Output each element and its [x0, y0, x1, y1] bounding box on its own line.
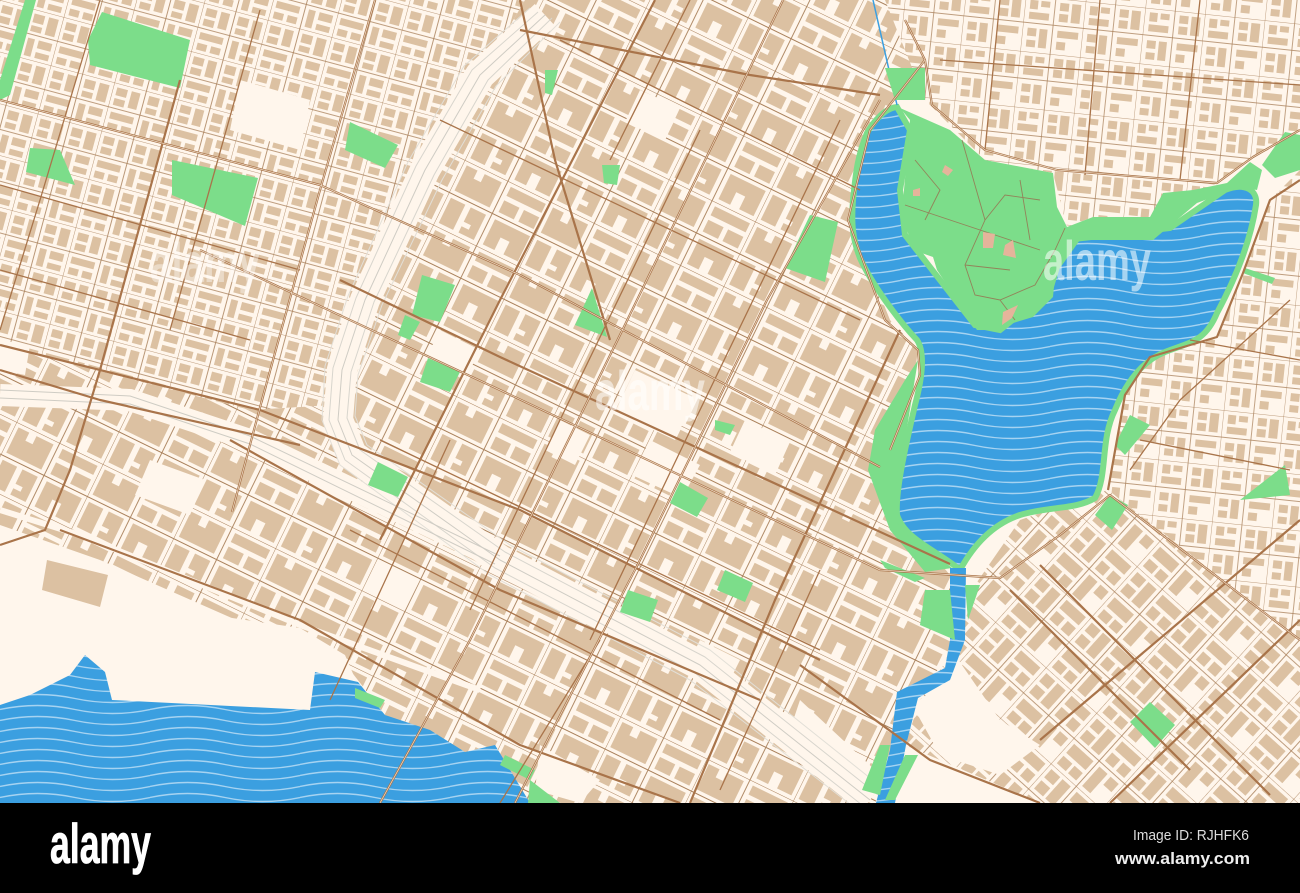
lake water [852, 107, 1256, 570]
park paths [905, 140, 1065, 320]
downtown blocks [0, 0, 960, 803]
park lawn [900, 108, 1262, 330]
south-east diagonal blocks [905, 490, 1300, 803]
footer bar [0, 803, 1300, 893]
south shore open land [915, 655, 1040, 775]
stream to the north [873, 0, 897, 105]
watermark west: alamy [150, 231, 260, 294]
lakeside park [900, 108, 1262, 330]
watermark over lake: alamy [1043, 229, 1151, 292]
bay water [0, 655, 530, 803]
rail corridor [0, 8, 885, 808]
alamy logo: alamy [50, 812, 151, 875]
park buildings [913, 165, 1018, 325]
watermark downtown: alamy [595, 359, 705, 422]
alamy watermarks [150, 229, 1151, 422]
port open land [0, 545, 360, 710]
open downtown blocks [0, 80, 875, 803]
west shore parkland [868, 360, 952, 572]
website: www.alamy.com [1114, 849, 1250, 868]
image id: Image ID: RJHFK6 [1133, 827, 1249, 844]
north-east neighbourhood blocks [885, 0, 1300, 227]
lake outlet stream [876, 568, 966, 803]
east shore blocks [1108, 170, 1300, 640]
west neighbourhood blocks [0, 0, 525, 410]
port warehouse [42, 560, 108, 607]
